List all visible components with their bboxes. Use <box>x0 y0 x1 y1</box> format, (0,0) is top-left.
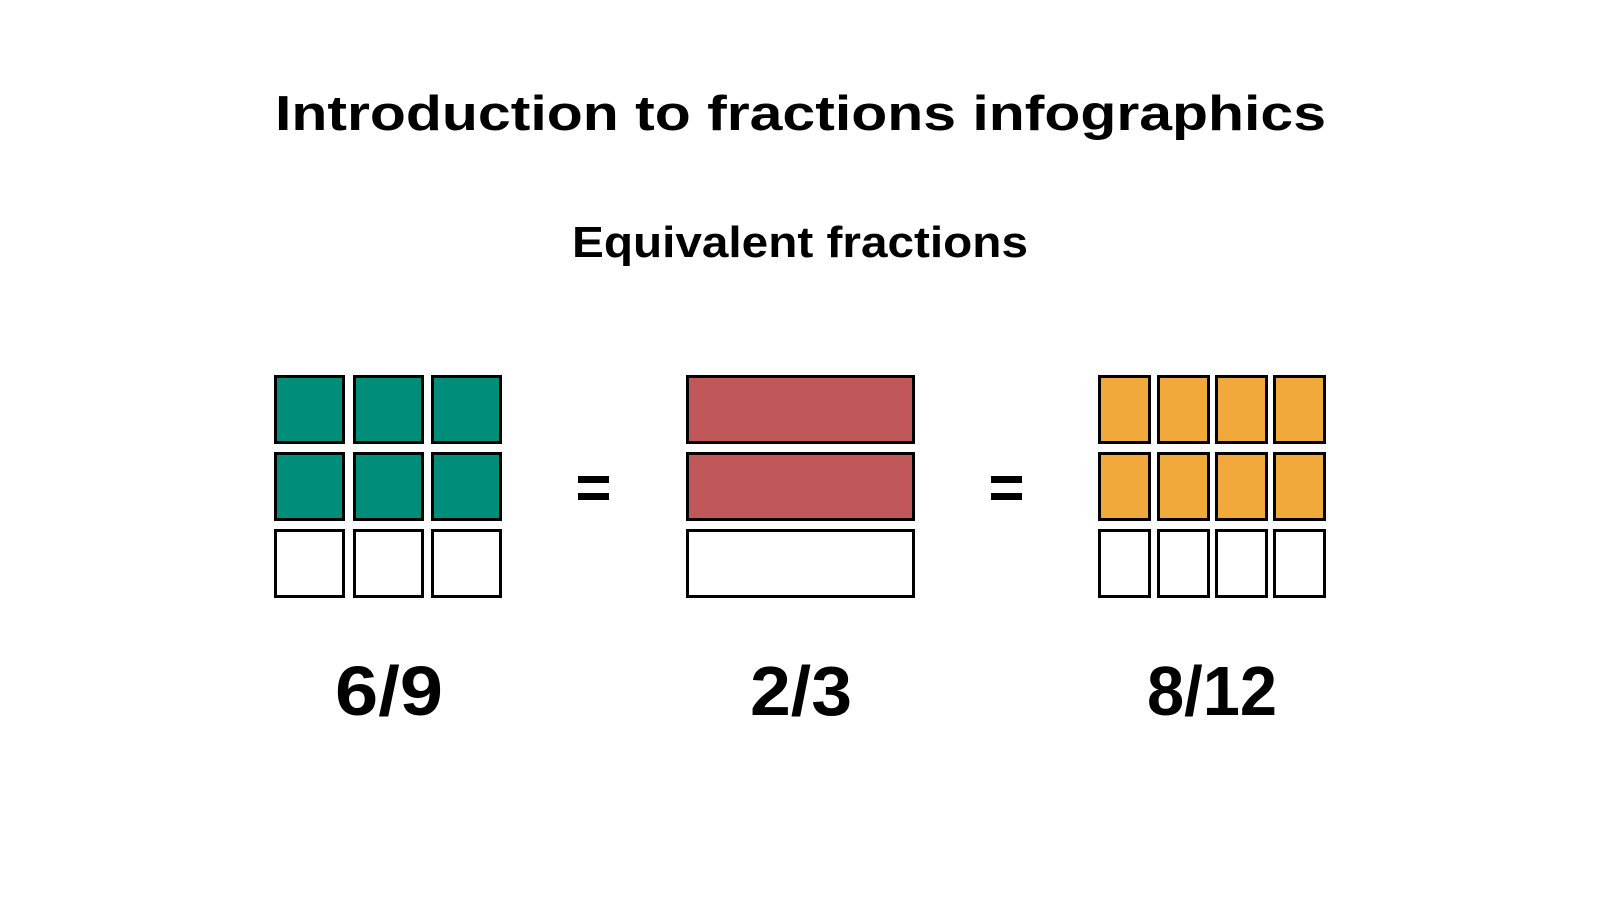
subtitle: Equivalent fractions <box>572 218 1028 267</box>
grid: 8/12 orange <box>1100 376 1324 596</box>
label 6/9: 6/9 <box>335 652 443 730</box>
label 2/3: 2/3 <box>750 652 852 730</box>
label 8/12: 8/12 <box>1147 652 1277 730</box>
grid: 6/9 green <box>276 376 500 596</box>
grid: 2/3 red <box>688 376 914 596</box>
title: Introduction to fractions infographics <box>275 87 1326 141</box>
equals sign 2 <box>991 476 1022 500</box>
equals sign 1 <box>578 476 609 500</box>
